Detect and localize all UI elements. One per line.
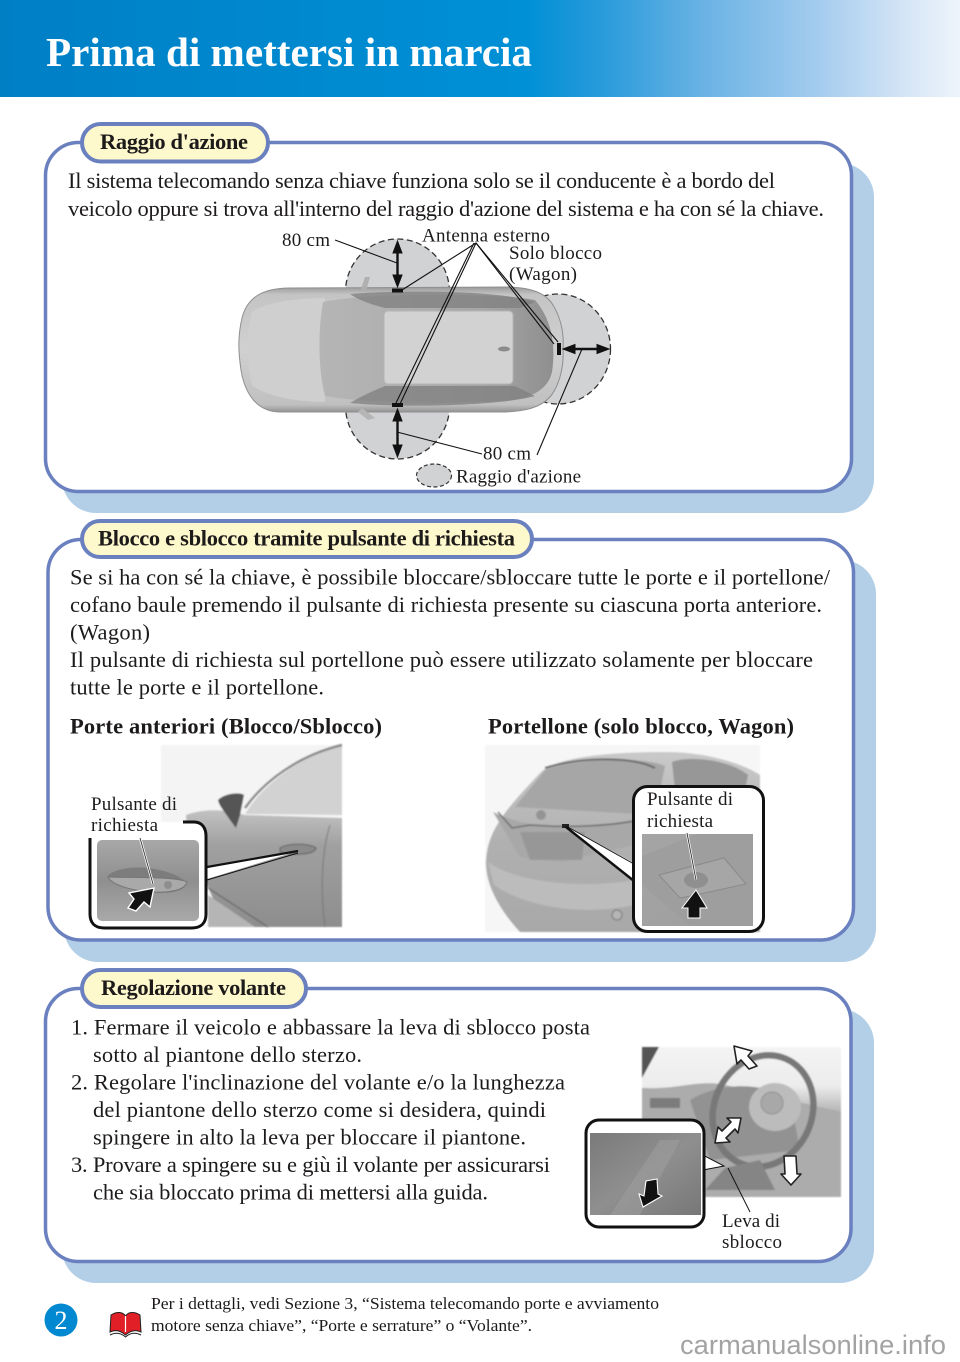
photo: front door [90,745,342,928]
label: request button: richiesta [91,815,159,836]
body text: tutte le porte e il portellone. [70,674,324,700]
numbered steps: 2. Regolare l'inclinazione del volante e/o la lunghezza [71,1070,565,1094]
legend: range zone: Raggio d'azione [456,466,581,488]
numbered steps: 1. Fermare il veicolo e abbassare la leva di sblocco posta [71,1014,590,1040]
antenna markers [392,288,561,407]
adjust arrows [715,1046,801,1185]
label: request button: Pulsante di [91,794,177,815]
heading tab: raggio d'azione: Raggio d'azione [100,129,248,154]
footer reference note: motore senza chiave”, “Porte e serrature” o “Volante”. [151,1316,532,1335]
label: request button: Pulsante di [647,789,733,810]
diagram labels: 80 cm [282,230,330,251]
callout pointer [566,826,634,880]
label: request button [647,789,733,832]
heading tab: regolazione volante [82,970,306,1007]
callout pointer [703,1154,724,1170]
leader line [728,1168,750,1212]
label: release lever [722,1211,782,1253]
photo: steering wheel [586,1039,841,1253]
range zones [346,239,610,459]
label: request button: richiesta [647,811,714,832]
page number badge: 2 [54,1306,68,1335]
diagram labels [282,226,602,464]
inset frame: tailgate button [634,786,764,932]
footer reference note: Per i dettagli, vedi Sezione 3, “Sistema telecomando porte e avviamento [151,1294,659,1313]
heading tab: raggio d'azione [82,124,268,162]
footer reference note [151,1294,659,1335]
numbered steps: spingere in alto la leva per bloccare il piantone. [93,1124,526,1150]
header banner [0,0,960,97]
car range diagram [239,226,610,488]
panel: regolazione volante [46,970,874,1283]
panel: blocco e sblocco [48,521,876,962]
body text [70,564,831,700]
body text: Se si ha con sé la chiave, è possibile bloccare/sbloccare tutte le porte e il portellone/ [70,564,831,590]
car top view [239,277,563,420]
panel: raggio d'azione [46,124,874,513]
page number badge [44,1304,78,1336]
label: request button [91,794,177,836]
body text: (Wagon) [70,620,150,644]
legend: range zone [416,464,581,488]
inset frame: release lever [586,1120,704,1227]
numbered steps: che sia bloccato prima di mettersi alla guida. [93,1180,488,1204]
inset frame: door handle [90,822,206,928]
intro text: Il sistema telecomando senza chiave funziona solo se il conducente è a bordo del [68,168,775,193]
leader lines [335,240,582,455]
diagram labels: 80 cm [483,444,531,464]
numbered steps: 3. Provare a spingere su e giù il volante per assicurarsi [71,1152,550,1177]
subheading: tailgate: Portellone (solo blocco, Wagon) [488,714,794,738]
numbered steps: del piantone dello sterzo come si desidera, quindi [93,1097,546,1122]
numbered steps: sotto al piantone dello sterzo. [93,1042,362,1067]
body text: Il pulsante di richiesta sul portellone può essere utilizzato solamente per bloccare [70,647,813,672]
body text: cofano baule premendo il pulsante di richiesta presente su ciascuna porta anteriore. [70,592,822,617]
watermark: carmanualsonline.info [680,1330,946,1360]
subheading: front doors: Porte anteriori (Blocco/Sblocco) [70,714,382,738]
label: release lever: sblocco [722,1232,782,1253]
diagram labels: (Wagon) [509,264,577,285]
heading tab: blocco e sblocco: Blocco e sblocco tramite pulsante di richiesta [98,526,515,550]
photo: tailgate [485,745,764,932]
title: Prima di mettersi in marcia [46,29,532,75]
diagram labels: Solo blocco [509,243,602,264]
double arrows [393,241,609,457]
icon: red book [110,1312,141,1337]
heading tab: regolazione volante: Regolazione volante [101,975,286,1000]
heading tab: blocco e sblocco [82,521,532,557]
intro text [68,168,824,221]
label: release lever: Leva di [722,1211,780,1232]
intro text: veicolo oppure si trova all'interno del raggio d'azione del sistema e ha con sé la chiave. [68,196,824,221]
numbered steps [71,1014,590,1204]
diagram labels: Antenna esterno [422,226,550,246]
callout pointer [207,851,298,879]
